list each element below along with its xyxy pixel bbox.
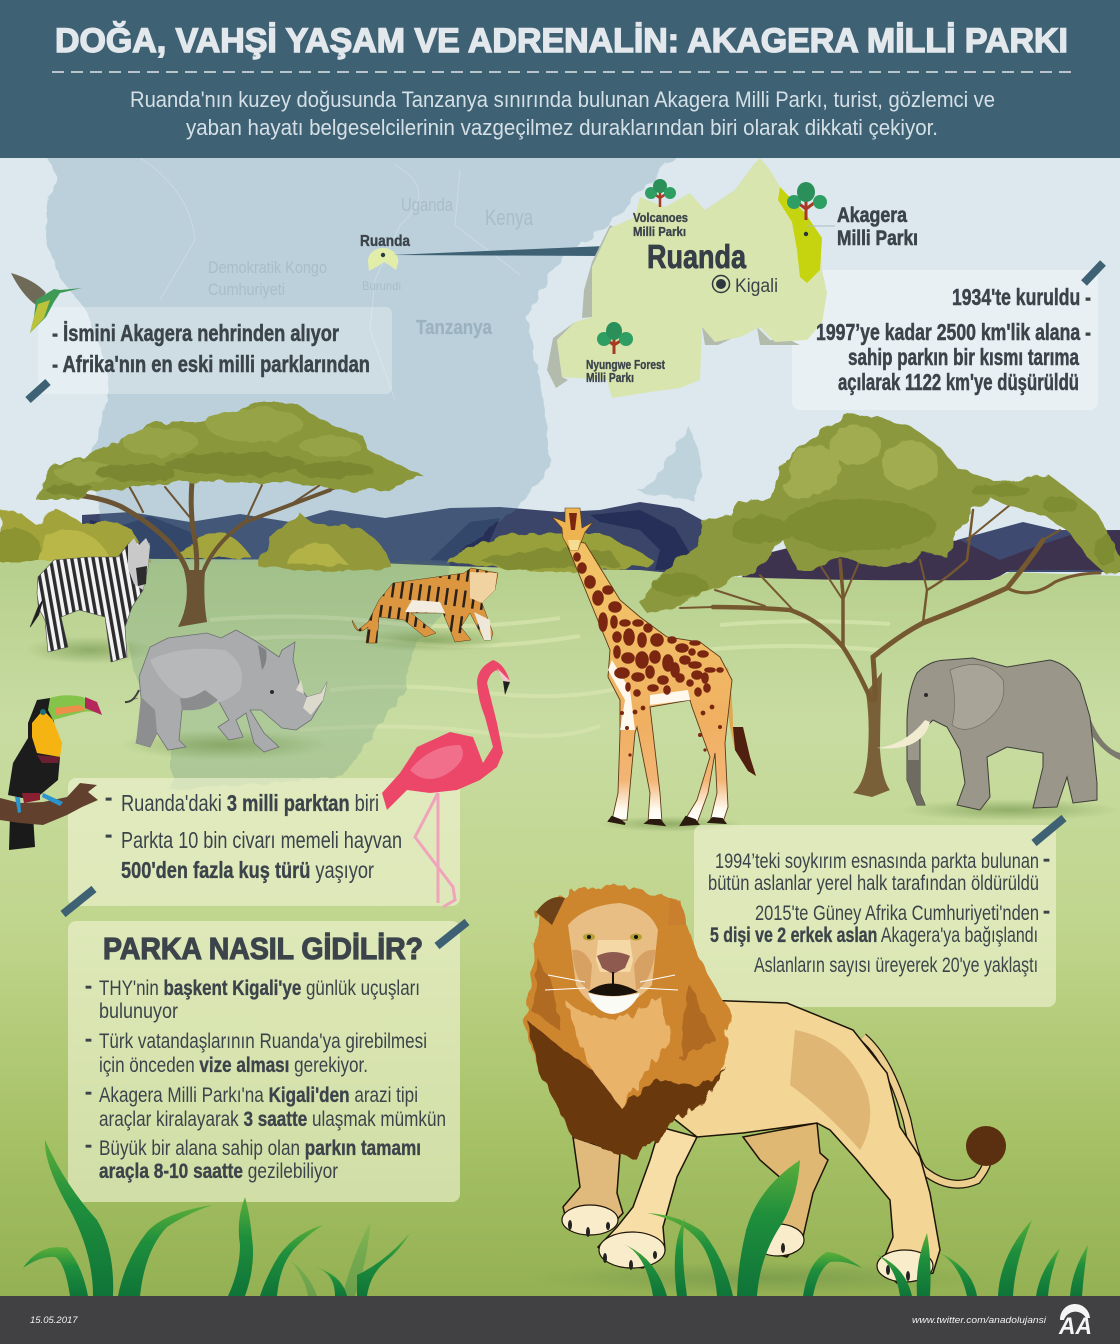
trunk: [853, 672, 890, 797]
panel: lions: 1994’teki soykırım esnasında parkta bulunan: [715, 850, 1039, 873]
panel: lions: -: [1043, 900, 1050, 923]
panel: lions: 2015'te Güney Afrika Cumhuriyeti'nden: [755, 902, 1039, 925]
title: DOĞA, VAHŞİ YAŞAM VE ADRENALİN: AKAGERA MİLLİ PARKI: [55, 22, 1068, 60]
tail: [9, 815, 35, 850]
text: park history: [816, 263, 1103, 395]
panel: lions: bütün aslanlar yerel halk tarafından öldürüldü: [708, 872, 1039, 895]
canopy: [36, 403, 425, 500]
claws: [568, 1220, 910, 1281]
face: [568, 903, 658, 1008]
map labels: neighbouring countries: Tanzanya: [416, 317, 493, 339]
map labels: neighbouring countries: Burundi: [362, 279, 401, 293]
animal: zebra: [25, 538, 155, 664]
branch: [0, 783, 98, 825]
mane: [523, 885, 733, 1160]
country borders: [140, 158, 520, 400]
map labels: neighbouring countries: Kenya: [485, 205, 534, 230]
ears: [536, 897, 565, 925]
head: [552, 508, 593, 550]
grass blades: [23, 1140, 1088, 1296]
tail: [863, 1037, 987, 1184]
body: [650, 1000, 940, 1283]
tree: right acacia: [640, 413, 1120, 797]
panel: wildlife: -: [105, 822, 112, 847]
tail: [724, 667, 756, 776]
background sky: [0, 158, 1120, 588]
panel: lions: 5 dişi ve 2 erkek aslan Akagera'ya bağışlandı: [710, 924, 1038, 947]
header band: yaban hayatı belgeselcilerinin vazgeçilmez duraklarından biri olarak dikkati çekiyor.: [186, 115, 938, 140]
Madagascar: [640, 427, 703, 500]
panel: how to get to the park: -: [85, 1081, 92, 1104]
body and legs: [565, 540, 732, 823]
panel: how to get to the park: THY'nin başkent Kigali'ye günlük uçuşları: [99, 977, 420, 1000]
grey relief pieces: [547, 163, 800, 388]
map labels: neighbouring countries: Cumhuriyeti: [208, 280, 285, 299]
footer: [0, 1296, 1120, 1344]
panel: lions: Aslanların sayısı üreyerek 20'ye yaklaştı: [754, 954, 1038, 977]
panel: how to get to the park: bulunuyor: [99, 1000, 178, 1023]
icon: Kigali marker: [712, 276, 730, 292]
panel background: park history: [792, 270, 1098, 410]
animal: lion: [523, 885, 1006, 1294]
panel: park name: - İsmini Akagera nehrinden alıyor: [52, 320, 339, 346]
icon: AA logo: AA: [1058, 1313, 1092, 1340]
panel: how to get to the park: için önceden vize alması gerekiyor.: [99, 1054, 368, 1077]
map of Rwanda: Akagera: [837, 204, 907, 227]
animal: giraffe: [552, 508, 756, 832]
heading: PARKA NASIL GİDİLİR?: [103, 931, 423, 966]
bushes on horizon: [0, 507, 653, 572]
icon: tree Nyungwe: [597, 322, 633, 354]
panel: wildlife: [63, 778, 460, 914]
near front leg: [598, 1127, 697, 1268]
map of Africa: [46, 158, 676, 790]
panel: how to get to the park: Türk vatandaşlarının Ruanda'ya girebilmesi: [99, 1030, 427, 1053]
map of Rwanda: Milli Parkı: [633, 224, 686, 239]
far front leg: [563, 1137, 623, 1235]
mountains: [82, 502, 1120, 583]
panel: wildlife: Parkta 10 bin civarı memeli hayvan: [121, 827, 402, 853]
panel: wildlife: 500'den fazla kuş türü yaşıyor: [121, 857, 374, 883]
throat: [32, 710, 62, 757]
animal: flamingo: [382, 660, 510, 907]
header band: [0, 0, 1120, 158]
panel: how to get to the park: -: [85, 975, 92, 998]
icon: hummingbird: [11, 273, 82, 333]
map labels: neighbouring countries: Demokratik Kongo: [208, 258, 327, 277]
far rear leg: [743, 1123, 828, 1257]
panel: how to get to the park: araçla 8-10 saatte gezilebiliyor: [99, 1160, 338, 1183]
social handle: www.twitter.com/anadolujansi: [912, 1315, 1047, 1326]
map labels: neighbouring countries: [208, 195, 534, 339]
body: [8, 698, 60, 798]
trunk: [178, 570, 207, 627]
animal: elephant: [877, 658, 1120, 821]
beak: [48, 695, 102, 720]
map of Rwanda: Volcanoes: [633, 210, 688, 225]
map of Rwanda: Kigali: [735, 276, 778, 297]
ground: [0, 558, 1120, 1300]
panel: how to get to the park: Büyük bir alana sahip olan parkın tamamı: [99, 1137, 421, 1160]
paws: [562, 1205, 933, 1282]
locator: Ruanda small marker: Ruanda: [360, 233, 410, 250]
locator: Ruanda small marker: [360, 233, 605, 271]
tree: left acacia: [36, 403, 425, 627]
map of Rwanda: Milli Parkı: [837, 227, 918, 250]
map labels: neighbouring countries: Uganda: [401, 195, 454, 215]
date: 15.05.2017: [30, 1315, 78, 1326]
panel: how to get to the park: Akagera Milli Parkı'na Kigali'den arazi tipi: [99, 1084, 418, 1107]
animal: rhino: [120, 630, 330, 760]
subtitle: Ruanda'nın kuzey doğusunda Tanzanya sınırında bulunan Akagera Milli Parkı, turist, gözlemci ve: [130, 87, 995, 112]
animal: toucan on branch: [0, 695, 102, 850]
canopy: [640, 413, 1120, 613]
map of Rwanda: Ruanda: [647, 238, 747, 275]
panel: park name: - Afrika'nın en eski milli parklarından: [52, 351, 370, 377]
animal: tiger: [352, 568, 505, 652]
panel: how to get to the park: [68, 921, 467, 1202]
panel: lions: [694, 818, 1064, 1007]
water ripples: [210, 616, 890, 736]
panel: how to get to the park: -: [85, 1134, 92, 1157]
panel: lions: -: [1043, 848, 1050, 871]
panel: how to get to the park: -: [85, 1028, 92, 1051]
icon: tree Volcanoes: [645, 179, 676, 207]
icon: tree Akagera: [787, 182, 827, 220]
hooves: [609, 817, 725, 825]
panel: wildlife: Ruanda'daki 3 milli parktan biri: [121, 790, 379, 816]
map of Rwanda: Nyungwe Forest: [586, 357, 666, 372]
panel: park name: [28, 307, 392, 400]
coat spots: [574, 553, 723, 756]
map of Rwanda: Milli Parkı: [586, 370, 634, 385]
panel: how to get to the park: araçlar kiralayarak 3 saatte ulaşmak mümkün: [99, 1108, 446, 1131]
map of Rwanda: [547, 158, 918, 398]
Akagera park area: [778, 187, 822, 283]
feet: [22, 793, 40, 803]
panel: wildlife: -: [105, 785, 112, 810]
